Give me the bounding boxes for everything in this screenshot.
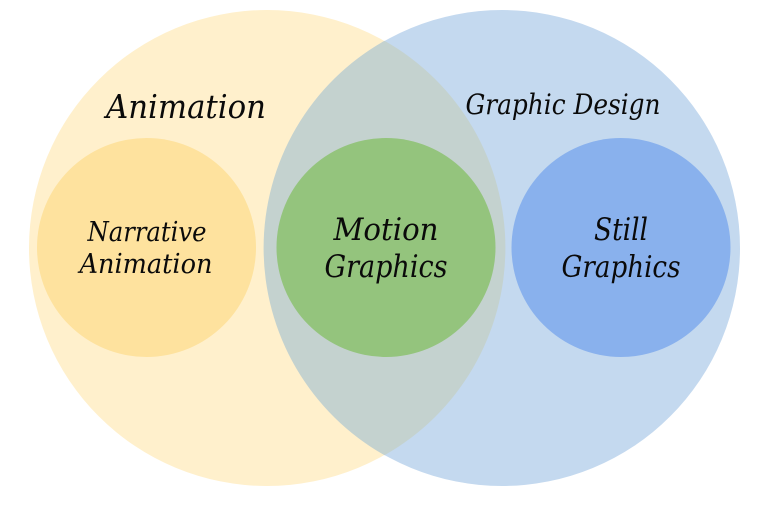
label: still graphics: Graphics	[562, 250, 680, 285]
label: narrative animation	[77, 217, 213, 280]
label: still graphics	[562, 212, 680, 285]
label: motion graphics: Graphics	[324, 249, 448, 285]
circle: narrative animation	[37, 138, 256, 357]
label: narrative animation: Narrative	[87, 217, 206, 248]
circle: animation	[29, 10, 505, 486]
label: motion graphics	[324, 212, 448, 285]
circle: still graphics	[512, 138, 730, 357]
label: narrative animation: Animation	[77, 249, 213, 280]
heading: animation: Animation	[103, 87, 266, 126]
label: still graphics: Still	[594, 212, 648, 248]
overlap region	[264, 41, 505, 455]
circle: motion graphics	[276, 138, 496, 357]
label: motion graphics: Motion	[333, 212, 438, 248]
circle: graphic design	[264, 10, 740, 486]
heading: graphic design: Graphic Design	[466, 88, 660, 121]
